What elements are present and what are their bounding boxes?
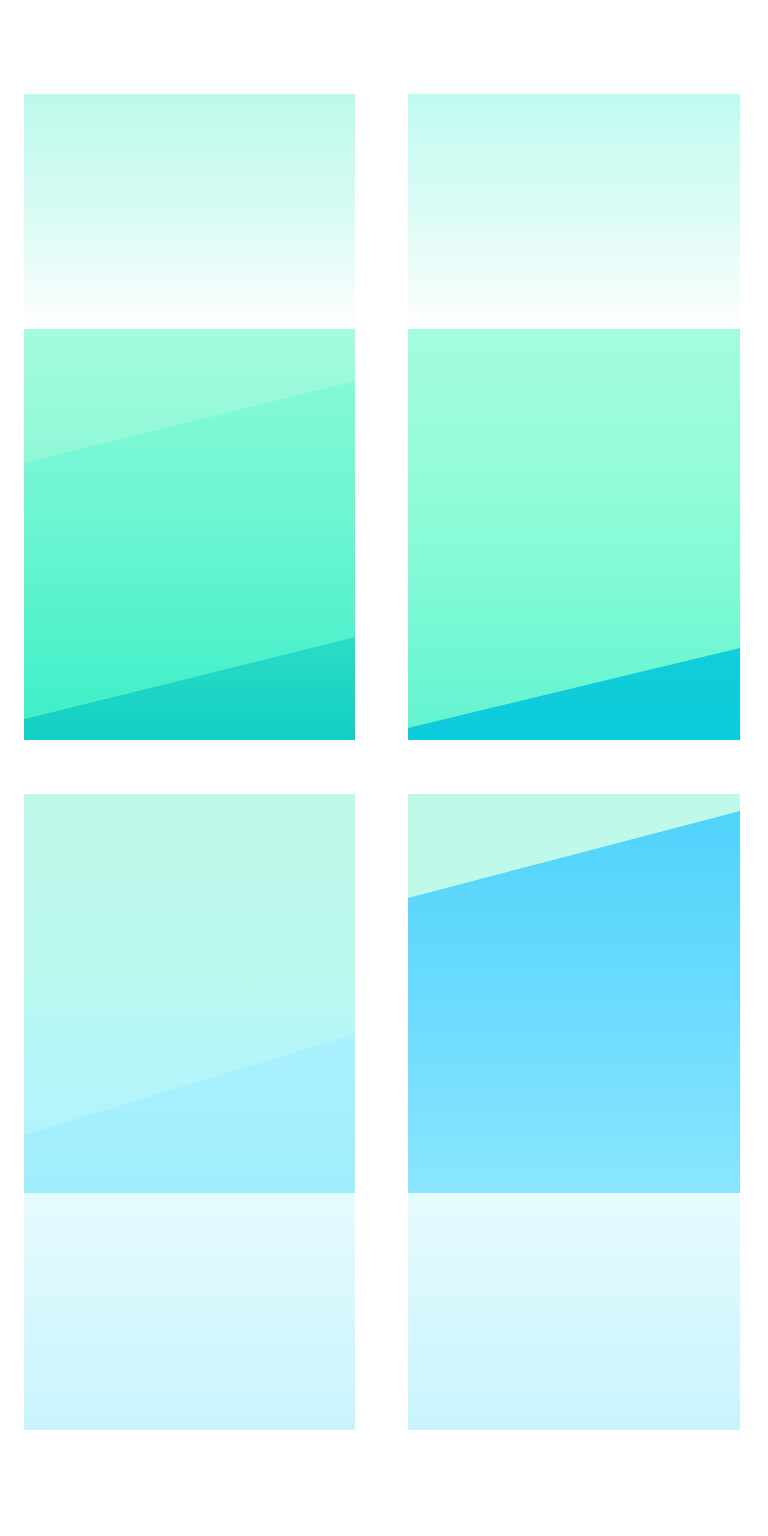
top right pale band [408, 94, 740, 329]
top left pale band [24, 94, 355, 329]
top left middle wedge [24, 381, 355, 719]
panel: top right [408, 94, 740, 740]
bottom left upper area [24, 794, 355, 1193]
top right bottom wedge [408, 648, 740, 740]
top right green area [408, 329, 740, 740]
bottom right blue wedge [408, 811, 740, 1193]
bottom right pale band [408, 1193, 740, 1430]
panel: bottom left [24, 794, 355, 1430]
bottom right upper area [408, 794, 740, 904]
bottom left wedge [24, 1034, 355, 1193]
top left green area [24, 329, 355, 469]
top left bottom wedge [24, 637, 355, 740]
panel: top left [24, 94, 355, 740]
panel: bottom right [408, 794, 740, 1430]
bottom left pale band [24, 1193, 355, 1430]
